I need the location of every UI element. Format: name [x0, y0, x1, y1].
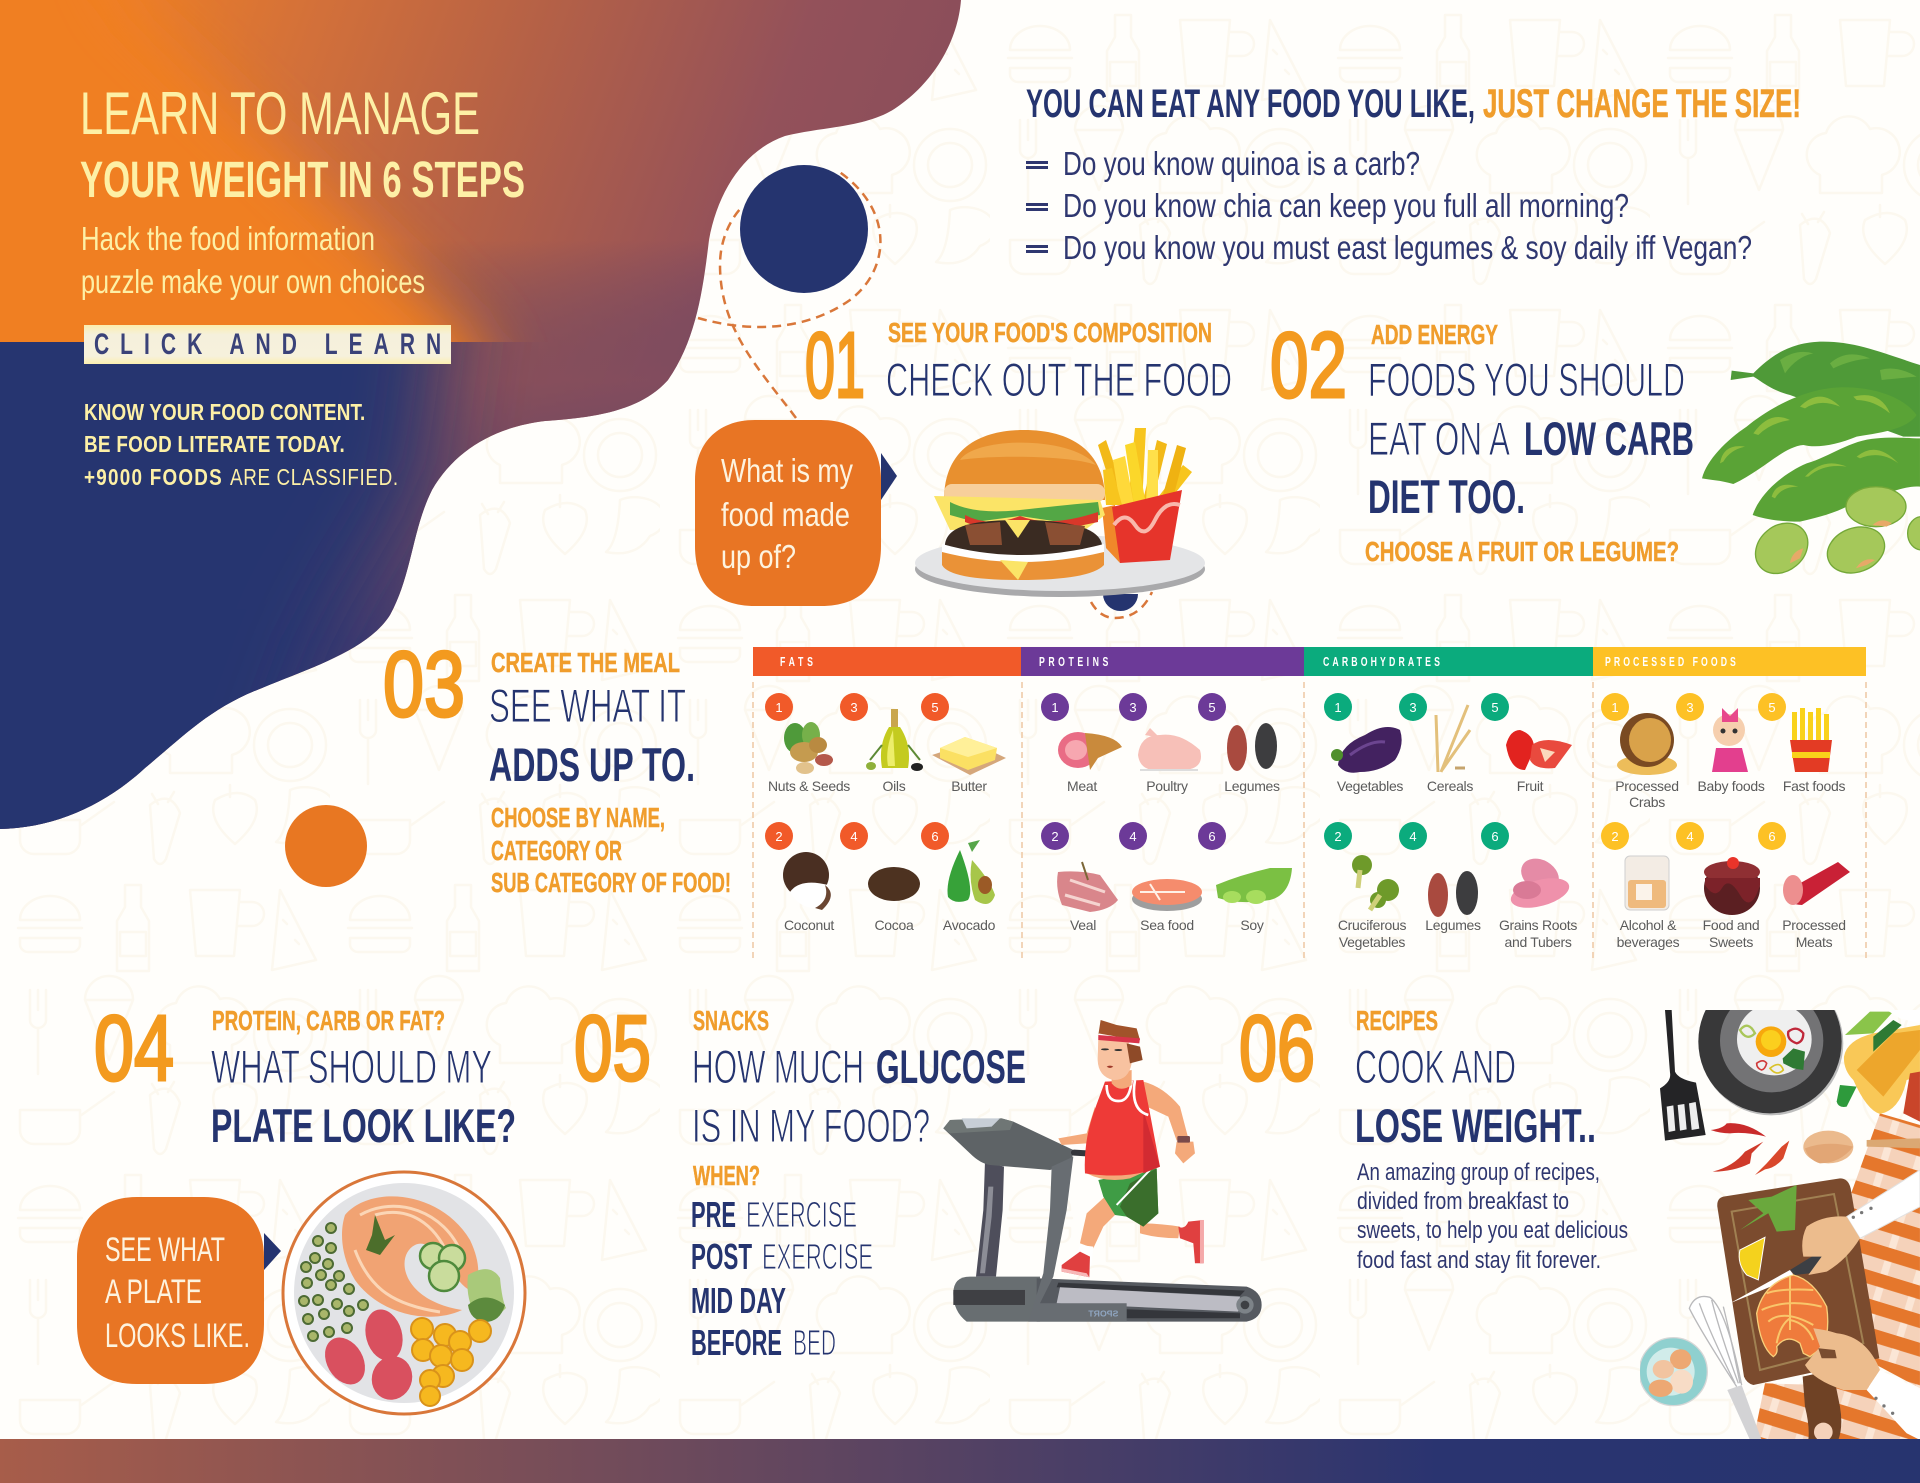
labels: carbohydrates: Cruciferous [1338, 917, 1406, 933]
column: processed foods: 1 [1611, 700, 1619, 715]
labels: carbohydrates: Vegetables [1339, 934, 1405, 950]
callout: what is my food made up of [695, 420, 897, 606]
column: carbohydrates [1324, 693, 1577, 950]
header: processed foods [1593, 647, 1866, 676]
list: when to snack: POST [691, 1236, 752, 1277]
step 06: cook and lose weight: LOSE WEIGHT.. [1355, 1099, 1596, 1152]
illustration: kitchen table with salmon [1639, 970, 1920, 1441]
icon: baby [1712, 708, 1748, 772]
step 05: how much glucose: WHEN? [693, 1160, 760, 1191]
step 05: how much glucose: SNACKS [693, 1005, 769, 1036]
column: proteins: 4 [1129, 829, 1137, 844]
icon: butter [932, 737, 1006, 775]
step 04: what should my plate look like [94, 996, 516, 1152]
icon: edamame pods [1702, 342, 1920, 584]
step 05: how much glucose: IS IN MY FOOD? [692, 1099, 930, 1152]
column: proteins: 3 [1129, 700, 1137, 715]
list: when to snack: EXERCISE [762, 1236, 873, 1277]
step 03: create the meal: ADDS UP TO. [489, 738, 695, 791]
step 02: foods you should eat: CHOOSE A FRUIT OR LEGUME? [1365, 536, 1679, 567]
labels: processed foods: Processed [1615, 778, 1679, 794]
column: fats: 5 [931, 700, 939, 715]
icon: legumes [1428, 871, 1478, 917]
list: questions: Do you know you must east legumes & soy daily iff Vegan? [1063, 229, 1752, 266]
icon: poultry [1138, 728, 1201, 770]
labels: processed foods: Processed [1782, 917, 1846, 933]
callout: what is my food made up of: up of? [721, 538, 796, 575]
callout: see what a plate looks like: SEE WHAT [105, 1231, 225, 1269]
text block: recipes description: divided from breakfast to [1357, 1188, 1569, 1215]
step 04: what should my plate look like: PROTEIN, CARB OR FAT? [212, 1005, 445, 1036]
column: proteins: 1 [1051, 700, 1059, 715]
labels: fats [768, 778, 996, 933]
labels: proteins: Sea food [1140, 917, 1194, 933]
list: when to snack: PRE [691, 1194, 736, 1235]
list: when to snack [691, 1194, 873, 1363]
table: food categories [753, 647, 1866, 962]
step 06: cook and lose weight [1239, 996, 1596, 1152]
step 02: foods you should eat: FOODS YOU SHOULD [1368, 353, 1685, 406]
labels: processed foods: Crabs [1629, 794, 1665, 810]
icon: wheat [1436, 705, 1470, 772]
subtitle: puzzle make your own choices [81, 263, 425, 300]
column: processed foods: 6 [1768, 829, 1776, 844]
column: proteins: 2 [1051, 829, 1059, 844]
callout: see what a plate looks like: LOOKS LIKE. [105, 1317, 250, 1355]
step 01: check out the food: CHECK OUT THE FOOD [886, 353, 1232, 406]
icon: cake [1704, 857, 1760, 915]
step 03: create the meal: CATEGORY OR [491, 835, 622, 866]
column: processed foods: 4 [1686, 829, 1694, 844]
labels: processed foods: beverages [1617, 934, 1680, 950]
step 02: foods you should eat: LOW CARB [1524, 412, 1694, 465]
text block: recipes description: An amazing group of recipes, [1357, 1159, 1600, 1186]
icon: salmon steak [1132, 879, 1202, 911]
text block: know your food content [84, 400, 398, 490]
subtitle [81, 220, 425, 300]
column: carbohydrates: 3 [1409, 700, 1417, 715]
step 05: how much glucose [574, 996, 1026, 1191]
step 02: foods you should eat [1270, 313, 1694, 567]
header: fats [753, 647, 1021, 676]
labels: proteins: Veal [1070, 917, 1096, 933]
list: when to snack: BEFORE [691, 1322, 782, 1363]
callout: see what a plate looks like [77, 1197, 281, 1384]
icon: navy circle with dashed path [698, 165, 880, 418]
labels: fats: Coconut [784, 917, 834, 933]
step 03: create the meal: SUB CATEGORY OF FOOD! [491, 867, 731, 898]
callout: what is my food made up of: What is my [721, 452, 853, 489]
text block: recipes description: food fast and stay fit forever. [1357, 1247, 1601, 1274]
callout: what is my food made up of: food made [721, 496, 850, 533]
labels: fats: Oils [883, 778, 906, 794]
text block: know your food content: KNOW YOUR FOOD CONTENT. [84, 400, 365, 425]
icon: meat [1058, 732, 1122, 770]
icon: avocado [948, 840, 995, 904]
callout: see what a plate looks like: A PLATE [105, 1273, 202, 1311]
icon: cocoa [868, 867, 920, 901]
column: fats: 6 [931, 829, 939, 844]
icon: orange circle [285, 805, 367, 887]
labels: proteins: Legumes [1224, 778, 1280, 794]
step 05: how much glucose: HOW MUCH [692, 1040, 864, 1093]
icon: processed meats [1783, 862, 1850, 905]
step 01: check out the food [805, 313, 1232, 417]
labels: proteins [1067, 778, 1280, 933]
treadmill [943, 1118, 1262, 1322]
text block: recipes description: sweets, to help you eat delicious [1357, 1217, 1628, 1244]
step 04: what should my plate look like: 04 [94, 996, 174, 1100]
step 06: cook and lose weight: RECIPES [1356, 1005, 1438, 1036]
step 06: cook and lose weight: COOK AND [1355, 1040, 1516, 1093]
icon: man running on treadmill [943, 1020, 1262, 1322]
labels: processed foods: Baby foods [1697, 778, 1765, 794]
labels: processed foods [1615, 778, 1846, 950]
labels: fats: Cocoa [875, 917, 914, 933]
labels: carbohydrates: Fruit [1517, 778, 1544, 794]
header: proteins: PROTEINS [1039, 656, 1108, 669]
column: processed foods: 5 [1768, 700, 1776, 715]
column: proteins: 6 [1208, 829, 1216, 844]
column: fats [765, 693, 1006, 933]
step 03: create the meal: CREATE THE MEAL [491, 647, 680, 678]
column: carbohydrates: 1 [1334, 700, 1342, 715]
column: processed foods: 2 [1611, 829, 1619, 844]
labels: proteins: Soy [1240, 917, 1264, 933]
step 05: how much glucose: 05 [574, 996, 651, 1100]
step 03: create the meal: CHOOSE BY NAME, [491, 802, 665, 833]
text block: know your food content: ARE CLASSIFIED. [230, 465, 398, 490]
step 03: create the meal: 03 [383, 632, 465, 736]
step 02: foods you should eat: DIET TOO. [1368, 470, 1525, 523]
step 04: what should my plate look like: PLATE LOOK LIKE? [211, 1099, 516, 1152]
step 05: how much glucose: GLUCOSE [876, 1040, 1026, 1093]
icon: sweet potato [1508, 852, 1572, 913]
icon: coconut [783, 852, 832, 910]
subtitle: Hack the food information [81, 220, 375, 257]
treadmill: SPORT [1088, 1309, 1118, 1319]
step 03: create the meal [383, 632, 731, 898]
icon: processed crabs bowl [1617, 713, 1677, 775]
icon: burger and fries on a plate [915, 428, 1205, 597]
labels: carbohydrates: Legumes [1425, 917, 1481, 933]
step 02: foods you should eat: EAT ON A [1368, 412, 1510, 465]
labels: processed foods: Alcohol & [1620, 917, 1677, 933]
step 01: check out the food: 01 [805, 313, 865, 417]
list: questions [1026, 145, 1752, 266]
labels: carbohydrates: Cereals [1427, 778, 1473, 794]
labels: processed foods: Fast foods [1783, 778, 1845, 794]
step 02: foods you should eat: 02 [1270, 313, 1347, 417]
runner [1058, 1020, 1204, 1277]
icon: nuts [784, 722, 833, 774]
labels: processed foods: Meats [1796, 934, 1833, 950]
labels: processed foods: Sweets [1709, 934, 1753, 950]
column: proteins: 5 [1208, 700, 1216, 715]
heading: you can eat any food: YOU CAN EAT ANY FOOD YOU LIKE, [1026, 82, 1475, 126]
column: processed foods: 3 [1686, 700, 1694, 715]
labels: proteins: Meat [1067, 778, 1097, 794]
header: processed foods: PROCESSED FOODS [1605, 656, 1736, 669]
labels: carbohydrates: Grains Roots [1499, 917, 1577, 933]
icon: soy [1216, 868, 1292, 904]
labels: fats: Avocado [943, 917, 996, 933]
step 01: check out the food: SEE YOUR FOOD'S COMPOSITION [888, 317, 1212, 348]
icon: legumes [1227, 723, 1277, 771]
column: fats: 2 [775, 829, 783, 844]
column: carbohydrates: 4 [1409, 829, 1417, 844]
labels: carbohydrates [1337, 778, 1577, 950]
column: proteins [1041, 693, 1292, 933]
column: fats: 4 [850, 829, 858, 844]
icon: alcohol glass [1625, 856, 1669, 910]
panel: gradient hero blob [0, 0, 961, 829]
list: questions: Do you know chia can keep you full all morning? [1063, 187, 1629, 224]
column: fats: 3 [850, 700, 858, 715]
step 04: what should my plate look like: WHAT SHOULD MY [211, 1040, 492, 1093]
column: carbohydrates: 5 [1491, 700, 1499, 715]
button: click and learn: CLICK AND LEARN [94, 329, 441, 361]
title: your weight in 6 steps: YOUR WEIGHT IN 6 STEPS [80, 151, 525, 208]
icon: eggplant [1331, 727, 1402, 773]
icon: healthy plate [283, 1172, 525, 1414]
text block: know your food content: BE FOOD LITERATE TODAY. [84, 432, 345, 457]
header: proteins [1021, 647, 1304, 676]
icon: oil bottle [866, 709, 923, 771]
icon: fast food fries [1790, 708, 1832, 772]
header: carbohydrates [1304, 647, 1593, 676]
icon: broccoli [1352, 855, 1399, 910]
step 06: cook and lose weight: 06 [1239, 996, 1315, 1100]
labels: fats: Nuts & Seeds [768, 778, 850, 794]
icon: veal [1057, 862, 1118, 912]
text block: recipes description [1357, 1159, 1628, 1274]
footer band [0, 1439, 1920, 1483]
labels: proteins: Poultry [1146, 778, 1188, 794]
labels: carbohydrates: and Tubers [1504, 934, 1572, 950]
list: questions: Do you know quinoa is a carb? [1063, 145, 1420, 182]
text block: know your food content: +9000 FOODS [84, 465, 222, 490]
labels: fats: Butter [951, 778, 987, 794]
icon: small navy half circle under plate [1091, 592, 1152, 618]
header: carbohydrates: CARBOHYDRATES [1323, 656, 1440, 669]
column: carbohydrates: 2 [1334, 829, 1342, 844]
step 02: foods you should eat: ADD ENERGY [1371, 319, 1498, 350]
column: fats: 1 [775, 700, 783, 715]
list: when to snack: MID DAY [691, 1280, 786, 1321]
step 03: create the meal: SEE WHAT IT [489, 679, 686, 732]
header: fats: FATS [780, 656, 813, 669]
column: carbohydrates: 6 [1491, 829, 1499, 844]
icon: strawberry [1506, 730, 1572, 770]
labels: processed foods: Food and [1703, 917, 1759, 933]
column: processed foods [1601, 693, 1850, 950]
list: when to snack: BED [793, 1322, 836, 1363]
labels: carbohydrates: Vegetables [1337, 778, 1403, 794]
title: learn to manage: LEARN TO MANAGE [80, 80, 480, 147]
list: when to snack: EXERCISE [746, 1194, 857, 1235]
